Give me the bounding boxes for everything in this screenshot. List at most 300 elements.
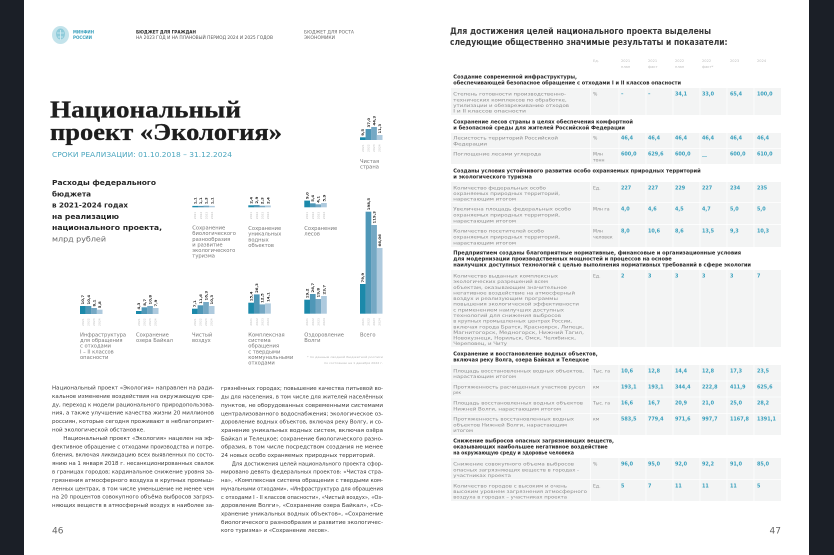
chart heading: на реализацию: [52, 212, 119, 221]
bar chart: Инфраструктура для обращения с отходами: I – II классов: [80, 349, 114, 355]
row: протяженность расчищенных: 344,4: [675, 385, 691, 391]
bar chart: Чистый воздух: [192, 291, 214, 344]
right page heading: [450, 27, 728, 48]
row: снижение выбросов: участниках проекта: [453, 474, 511, 479]
row: площадь восстановленных: [453, 369, 770, 380]
row: количество городов: 7: [648, 484, 652, 490]
row: комплексные экологические разрешения: 2: [621, 274, 624, 280]
row: площадь Нижней Волги: 21,0: [702, 401, 715, 407]
bar chart: Чистый воздух: 7,1: [192, 300, 197, 307]
row: протяженность расчищенных: 411,9: [730, 385, 746, 391]
row: поглощение: тонн: [593, 158, 604, 163]
row: посетители ООПТ: Млн: [593, 229, 603, 235]
row: количество федеральных ООПТ: Количество федеральных особо: [453, 186, 546, 192]
text block: left column: няющих веществ в атмосферный воздух в наиболее за-: [52, 502, 214, 509]
row: площадь ООПТ: охраняемых природных территорий,: [453, 212, 561, 218]
row: степень готовности: 34,1: [675, 92, 688, 98]
row: поглощение: 600,0: [621, 152, 637, 158]
bar chart: Комплексная система обращения с ТКО: обращения: [248, 344, 279, 350]
row: протяженность Нижней Волги: 779,4: [648, 417, 664, 423]
row: площадь Нижней Волги: 20,9: [675, 401, 688, 407]
row: комплексные экологические разрешения: экологических разрешений всем: [453, 278, 549, 285]
bar chart: Сохранение лесов: 5,4: [310, 195, 315, 202]
chart heading: бюджета: [52, 189, 91, 198]
row: поглощение: 600,0: [675, 152, 691, 158]
row: лесистость: %: [593, 136, 598, 142]
bar chart: Инфраструктура для обращения с отходами: 2021: [81, 318, 85, 326]
bar chart: Комплексная система обращения с ТКО: 26,3: [254, 283, 259, 293]
row: площадь ООПТ: 4,0: [621, 207, 630, 213]
bar chart: Чистая страна: страна: [360, 164, 379, 170]
text block: right column: мировано девять федеральных проектов: «Чистая стра-: [221, 470, 383, 476]
row: степень готовности: %: [593, 92, 598, 98]
bar chart: Сохранение лесов: Сохранение: [304, 226, 337, 232]
bar chart: Сохранение биологического разнообразия: 2024: [210, 212, 214, 219]
bar chart: Всего: 119,3: [371, 211, 376, 224]
bar chart: Чистая страна: 2024: [378, 144, 382, 152]
text block: left column: ду, переход к модели рационального природопользова-: [52, 402, 214, 408]
row: площадь Нижней Волги: 16,6: [621, 401, 634, 407]
bar chart: Комплексная система обращения с ТКО: отходами: [248, 361, 275, 367]
bar chart: Чистая страна: 44,3: [371, 116, 376, 126]
section heading: леса: и безопасной среды для жителей Российской Федерации: [453, 125, 626, 132]
row: протяженность Нижней Волги: 1391,1: [757, 417, 776, 423]
bar chart: Чистая страна: 11,3: [377, 124, 382, 134]
row: протяженность Нижней Волги: [453, 417, 776, 434]
row: количество федеральных ООПТ: 229: [675, 186, 686, 192]
row: площадь восстановленных: 10,6: [621, 369, 634, 375]
row: количество федеральных ООПТ: 227: [702, 186, 713, 192]
bar chart: Оздоровление Волги: 2024: [322, 318, 326, 326]
bar chart: Сохранение биологического разнообразия: Сохранение: [192, 226, 225, 232]
bar chart: Чистый воздух: 11,6: [198, 294, 203, 304]
row: площадь восстановленных: 14,4: [675, 369, 688, 375]
text block: right column: Для достижения целей национального проекта сфор-: [232, 460, 383, 467]
bar chart: Сохранение биологического разнообразия: 1,1: [209, 197, 214, 204]
row: комплексные экологические разрешения: технологий для снижения выбросов: [453, 312, 561, 319]
row: комплексные экологические разрешения: включая города Братск, Красноярск, Липецк,: [453, 324, 585, 330]
row: площадь восстановленных: 12,8: [648, 369, 661, 375]
table column headers: [593, 59, 767, 69]
bar chart: Сохранение уникальных водных объектов: 2,4: [265, 197, 270, 204]
row: протяженность расчищенных: км: [593, 386, 600, 391]
table column headers: 2023: [730, 59, 739, 63]
row: площадь восстановленных: Площадь восстановленных водных объектов,: [453, 369, 585, 375]
row: посетители ООПТ: 10,6: [648, 229, 661, 235]
bar chart: Инфраструктура для обращения с отходами: 2023: [92, 318, 96, 326]
row: посетители ООПТ: 13,5: [702, 229, 715, 235]
right page heading: следующие общественно значимые результаты и показатели:: [450, 37, 728, 48]
section heading: предприятия: для модернизации производственных мощностей и процессов на основе: [453, 256, 672, 263]
bar chart: Всего: 66,06: [377, 234, 382, 247]
bar chart: Сохранение озера Байкал: 2024: [154, 318, 158, 326]
text block: right column: образия, в том числе посредством создания не менее: [221, 445, 384, 451]
row: протяженность расчищенных: рек: [453, 391, 461, 396]
row: количество городов: [453, 484, 761, 501]
bar chart: Всего: 2023: [372, 318, 376, 326]
section heading: ООПТ: и экологического туризма: [453, 175, 532, 181]
row: поглощение: 610,0: [757, 152, 773, 158]
row: площадь ООПТ: 4,5: [675, 207, 684, 213]
table column headers: 2024: [757, 59, 767, 63]
row: количество городов: 11: [675, 484, 682, 490]
row: количество федеральных ООПТ: 235: [757, 186, 768, 192]
row: посетители ООПТ: [453, 228, 770, 246]
row: площадь восстановленных: 17,3: [730, 369, 743, 375]
bar chart: Всего: 2024: [378, 318, 382, 326]
table: results and indicators: [451, 59, 781, 501]
row: количество городов: 11: [730, 484, 737, 490]
table column headers: план: [675, 65, 685, 69]
bar chart: Сохранение уникальных водных объектов: 2022: [255, 212, 259, 219]
bar chart: Сохранение лесов: 2022: [311, 212, 315, 219]
row: степень готовности: [453, 92, 773, 114]
text block: right column: 24 новых особо охраняемых природных территорий.: [221, 452, 375, 459]
section heading: выбросы: оказывающих наибольшее негативное воздействие: [453, 444, 608, 451]
bar chart: Инфраструктура для обращения с отходами: 2022: [86, 318, 90, 326]
row: снижение выбросов: 95,0: [648, 462, 661, 468]
row: степень готовности: I и II классов опасности: [453, 108, 526, 114]
row: комплексные экологические разрешения: [453, 274, 761, 347]
row: площадь ООПТ: [453, 207, 766, 224]
text block: right column: централизованного водоснабжения; экологическое оз-: [221, 411, 383, 417]
text block: right column: с отходами I - II классов опасности», «Чистый воздух», «Оз-: [221, 494, 383, 501]
section heading: водные объекты: Сохранение и восстановление водных объектов,: [453, 351, 598, 358]
row: количество федеральных ООПТ: охраняемых природных территорий,: [453, 190, 561, 197]
bar chart: Чистый воздух: 10,3: [209, 295, 214, 304]
bar chart: Оздоровление Волги: Волги: [304, 338, 320, 344]
row: количество федеральных ООПТ: [453, 186, 768, 203]
chart heading: млрд рублей: [52, 234, 106, 243]
bar chart: Инфраструктура для обращения с отходами: 10,4: [86, 295, 91, 304]
bar chart: Комплексная система обращения с ТКО: 2021: [249, 318, 253, 326]
bar chart: Всего: 79,9: [360, 273, 365, 283]
text block: left column: ной экологической обстановке.: [52, 426, 145, 434]
bar chart: Чистый воздух: 16,3: [203, 291, 208, 300]
row: площадь восстановленных: Тыс. га: [592, 369, 610, 375]
text block: right column: [221, 385, 384, 534]
bar chart: Всего: 2021: [361, 318, 365, 326]
table column headers: 2021: [648, 59, 657, 63]
text block: left column: ния, а также улучшение качества жизни 20 миллионов: [52, 411, 214, 417]
bar chart: Инфраструктура для обращения с отходами: 5,8: [97, 301, 102, 308]
bar chart: Инфраструктура для обращения с отходами: для обращения: [80, 338, 122, 344]
row: лесистость: Лесистость территорий Российской: [453, 135, 558, 142]
row: протяженность расчищенных: Протяженность расчищенных участков русел: [453, 385, 585, 391]
bar chart: Сохранение лесов: 2024: [322, 212, 326, 219]
row: количество городов: 11: [702, 484, 709, 490]
section heading: выбросы: [453, 438, 614, 457]
bar chart: Сохранение уникальных водных объектов: объектов: [248, 243, 274, 249]
row: степень готовности: –: [648, 92, 651, 98]
text block: right column: Байкал и Телецкое; сохранение биологического разно-: [221, 435, 383, 442]
bar chart: Оздоровление Волги: 2021: [305, 318, 309, 326]
row: площадь Нижней Волги: Площадь восстановленных водных объектов: [453, 401, 583, 407]
bar chart: Комплексная система обращения с ТКО: система: [248, 338, 271, 344]
bar chart: Чистая страна: 9,5: [360, 129, 365, 136]
right page heading: Для достижения целей национального проекта выделены: [450, 27, 711, 37]
bar chart: Оздоровление Волги: 26,7: [310, 283, 315, 293]
bar chart: Инфраструктура для обращения с отходами: 10,7: [80, 295, 85, 304]
bar chart: Комплексная система обращения с ТКО: [248, 283, 293, 366]
bar chart: Чистый воздух: воздух: [192, 338, 211, 344]
bar chart: Сохранение биологического разнообразия: и развитие: [192, 242, 223, 248]
bar chart: Чистая страна: 2022: [366, 144, 370, 152]
row: комплексные экологические разрешения: 7: [757, 274, 761, 280]
row: посетители ООПТ: 8,0: [621, 229, 630, 235]
row: комплексные экологические разрешения: 3: [730, 274, 734, 280]
section heading: предприятия: [453, 250, 752, 268]
bar chart: Сохранение лесов: 9,0: [304, 192, 309, 199]
bar chart: Всего: 198,5: [366, 198, 371, 210]
row: количество городов: 5: [621, 484, 625, 490]
row: снижение выбросов: 92,2: [702, 462, 714, 468]
row: снижение выбросов: 85,0: [757, 462, 770, 468]
row: площадь восстановленных: 12,8: [702, 369, 715, 375]
row: лесистость: 46,4: [621, 136, 634, 142]
header: section name: [304, 30, 354, 40]
bar chart: Оздоровление Волги: 19,2: [304, 288, 309, 298]
row: комплексные экологические разрешения: Череповец, и Читу: [453, 341, 507, 347]
bar chart: Инфраструктура для обращения с отходами: с отходами: [80, 344, 111, 350]
row: площадь ООПТ: нарастающим итогом: [453, 219, 517, 224]
bar chart: Комплексная система обращения с ТКО: 2022: [255, 318, 259, 326]
bar chart: Сохранение уникальных водных объектов: 2,3: [260, 197, 265, 204]
bar chart: Сохранение биологического разнообразия: 2022: [199, 212, 203, 219]
bar chart: Оздоровление Волги: 23,7: [321, 285, 326, 295]
row: посетители ООПТ: охраняемых природных территорий,: [453, 233, 561, 240]
row: площадь ООПТ: Увеличена площадь федеральных особо: [453, 207, 571, 213]
row: протяженность Нижней Волги: 1167,8: [730, 417, 749, 423]
chart footnote: по состоянию на 1 декабря 2022 г.: [324, 361, 383, 365]
bar chart: Сохранение уникальных водных объектов: водных: [248, 237, 269, 243]
bar chart: Сохранение лесов: 5,9: [321, 194, 326, 202]
row: поглощение: [453, 152, 773, 163]
bar chart: Оздоровление Волги: Оздоровление: [304, 333, 344, 339]
row: комплексные экологические разрешения: 3: [675, 274, 679, 280]
row: протяженность расчищенных: 193,1: [648, 385, 664, 391]
bar chart: Комплексная система обращения с ТКО: Комплексная: [248, 333, 285, 339]
bar chart: Оздоровление Волги: 2022: [311, 318, 315, 326]
bar chart: Сохранение лесов: 2021: [305, 212, 309, 219]
row: лесистость: 46,4: [757, 136, 770, 142]
text block: left column: грязнения атмосферного воздуха в крупных промыш-: [52, 478, 214, 484]
bar chart: Инфраструктура для обращения с отходами: 2024: [98, 318, 102, 326]
row: поглощение: Поглощение лесами углерода: [453, 152, 541, 158]
bar chart: Чистая страна: 2021: [361, 144, 365, 152]
row: степень готовности: 65,4: [730, 92, 743, 98]
row: комплексные экологические разрешения: 3: [648, 274, 652, 280]
bar chart: Сохранение озера Байкал: 2021: [137, 318, 141, 326]
row: лесистость: 46,4: [648, 136, 661, 142]
row: комплексные экологические разрешения: Магнитогорск, Медногорск, Нижний Тагил,: [453, 329, 585, 336]
row: степень готовности: 33,0: [702, 92, 715, 98]
bar chart: Сохранение уникальных водных объектов: 2024: [266, 212, 270, 219]
bar chart: Чистая страна: 2023: [372, 144, 376, 152]
header: document title: [136, 30, 273, 40]
row: комплексные экологические разрешения: 3: [702, 274, 706, 280]
section heading: ООПТ: [453, 168, 701, 181]
row: снижение выбросов: 91,0: [730, 462, 743, 468]
row: комплексные экологические разрешения: объектам, оказывающим значительное: [453, 285, 567, 291]
bar chart: Чистый воздух: 2021: [193, 318, 197, 326]
bar chart: Комплексная система обращения с ТКО: коммунальными: [248, 355, 293, 361]
row: лесистость: 46,4: [702, 136, 715, 142]
bar chart: Сохранение уникальных водных объектов: уникальных: [248, 232, 281, 238]
row: посетители ООПТ: 8,6: [675, 229, 684, 235]
text block: left column: на 20 процентов совокупного объёма выбросов загряз-: [52, 495, 214, 501]
bar chart: Сохранение биологического разнообразия: экологического: [192, 248, 235, 254]
row: посетители ООПТ: Количество посетителей особо: [453, 228, 544, 235]
header: section name: БЮДЖЕТ ДЛЯ РОСТА: [304, 30, 354, 34]
bar chart: Чистая страна: [360, 116, 382, 170]
bar chart: Сохранение биологического разнообразия: 1,1: [193, 197, 198, 204]
row: протяженность Нижней Волги: объектов Нижней Волги, нарастающим: [453, 421, 568, 428]
bar chart: Чистый воздух: Чистый: [192, 332, 212, 338]
bar chart: Комплексная система обращения с ТКО: с твердыми: [248, 349, 280, 355]
title: Национальный: [50, 96, 241, 124]
row: снижение выбросов: 92,0: [675, 462, 688, 468]
bar chart: Сохранение биологического разнообразия: разнообразия: [192, 237, 230, 243]
section heading: ООПТ: Созданы условия устойчивого развития особо охраняемых природных территорий: [453, 168, 701, 175]
bar chart: Всего: Всего: [360, 333, 376, 339]
row: площадь ООПТ: 4,7: [702, 207, 711, 213]
bar chart: Сохранение озера Байкал: озера Байкал: [136, 337, 173, 344]
bar chart: Сохранение уникальных водных объектов: 2021: [249, 212, 253, 219]
bar chart: Сохранение лесов: 2023: [316, 212, 320, 219]
text block: left column: ленных центрах, в том числе уменьшение не менее чем: [52, 486, 214, 492]
chart heading: [52, 178, 162, 243]
bar chart: Комплексная система обращения с ТКО: 12,5: [260, 293, 265, 303]
bar chart: Оздоровление Волги: 19,8: [316, 288, 321, 298]
row: площадь ООПТ: Млн га: [593, 207, 610, 213]
row: снижение выбросов: Снижение совокупного объема выбросов: [453, 462, 574, 468]
row: площадь Нижней Волги: 28,2: [757, 401, 769, 407]
row: посетители ООПТ: человек: [593, 235, 613, 240]
bar chart: Сохранение лесов: лесов: [304, 232, 320, 238]
chart footnote: * по данным сводной бюджетной росписи: [307, 355, 383, 359]
title: проект «Экология»: [50, 119, 282, 146]
header: ministry logo: [52, 26, 94, 44]
row: снижение выбросов: 96,0: [621, 462, 634, 468]
row: посетители ООПТ: 10,3: [757, 229, 770, 235]
text block: right column: мунальными отходами», «Инфраструктура для обращения: [221, 486, 383, 492]
section heading: инфраструктура: Создание современной инфраструктуры,: [453, 74, 577, 81]
text block: right column: пунктов, не оборудованных современными системами: [221, 403, 383, 409]
text block: left column: россиян, которые сегодня проживают в неблагоприят-: [52, 419, 214, 425]
text block: right column: ды для населения, в том числе для жителей населённых: [221, 394, 384, 401]
subtitle: project dates: СРОКИ РЕАЛИЗАЦИИ: 01.10.2018 – 31.12.2024: [52, 150, 232, 159]
section heading: водные объекты: включая реку Волга, озера Байкал и Телецкое: [453, 357, 590, 364]
bar chart: Сохранение озера Байкал: 4,3: [136, 302, 141, 310]
chart heading: Расходы федерального: [52, 178, 156, 187]
text block: right column: на», «Комплексная система обращения с твердыми ком-: [221, 478, 383, 484]
row: лесистость: 46,4: [730, 136, 743, 142]
row: степень готовности: Степень готовности производственно-: [453, 92, 566, 98]
section heading: леса: Сохранение лесов страны в целях обеспечения комфортной: [453, 119, 634, 126]
bar chart: Сохранение лесов: [304, 192, 337, 238]
row: протяженность Нижней Волги: 971,6: [675, 417, 691, 423]
row: протяженность Нижней Волги: 583,5: [621, 417, 637, 423]
bar chart: Сохранение озера Байкал: Сохранение: [136, 332, 169, 338]
row: площадь восстановленных: 23,5: [757, 369, 770, 375]
bar chart: Всего: [360, 198, 382, 338]
bar chart: Сохранение озера Байкал: 10,8: [147, 295, 152, 304]
bar chart: Сохранение биологического разнообразия: туризма: [192, 254, 215, 260]
text block: right column: хранение уникальных водных объектов», «Сохранение: [221, 511, 384, 517]
text block: right column: биологического разнообразия и развитие экологичес-: [221, 520, 383, 526]
text block: right column: грязнённых городах; повышение качества питьевой во-: [221, 385, 383, 392]
section heading: инфраструктура: обеспечивающей безопасное обращение с отходами I и II классов опасности: [453, 80, 682, 87]
bar chart: Инфраструктура для обращения с отходами: 8,1: [91, 299, 96, 306]
row: протяженность Нижней Волги: итогом: [453, 429, 474, 434]
bar chart: Сохранение биологического разнообразия: 1,1: [198, 197, 203, 204]
row: количество федеральных ООПТ: 234: [730, 186, 741, 192]
bar chart: Сохранение лесов: 4,1: [316, 196, 321, 203]
table column headers: план: [621, 65, 631, 69]
text block: left column: [52, 384, 215, 509]
bar chart: Сохранение озера Байкал: 2022: [142, 318, 146, 326]
bar chart: Сохранение биологического разнообразия: биологического: [192, 231, 236, 237]
row: площадь Нижней Волги: 16,7: [648, 401, 661, 407]
row: протяженность Нижней Волги: Протяженность восстановленных водных: [453, 417, 574, 423]
row: площадь Нижней Волги: [453, 401, 769, 412]
bar chart: Комплексная система обращения с ТКО: 2023: [260, 318, 264, 326]
text block: right column: доровление Волги», «Сохранение озера Байкал», «Со-: [221, 502, 383, 509]
bar chart: Сохранение уникальных водных объектов: 2,4: [249, 197, 254, 204]
row: комплексные экологические разрешения: негативное воздействие на атмосферный: [453, 289, 575, 296]
page number 46: 46: [52, 526, 64, 536]
row: лесистость: 46,4: [675, 136, 688, 142]
row: количество федеральных ООПТ: нарастающим итогом: [453, 198, 517, 203]
row: площадь ООПТ: 4,6: [648, 207, 657, 213]
bar chart: Инфраструктура для обращения с отходами: опасности: [80, 355, 108, 361]
bar chart: Оздоровление Волги: [304, 283, 344, 344]
text block: right column: кого туризма» и «Сохранение лесов».: [221, 528, 329, 534]
row: количество городов: высоким уровнем загрязнения атмосферного: [453, 489, 587, 495]
section heading: предприятия: Предприятием созданы благоприятные нормативные, финансовые и организационные условия: [453, 250, 741, 257]
row: количество городов: 5: [757, 484, 761, 490]
icon: emblem: [52, 26, 69, 44]
row: количество городов: воздуха в городах – участниках проекта: [453, 496, 567, 501]
bar chart: Чистый воздух: 2023: [204, 318, 208, 326]
row: комплексные экологические разрешения: Новокузнецк, Норильск, Омск, Челябинск,: [453, 336, 577, 342]
row: протяженность расчищенных: 193,1: [621, 385, 637, 391]
bar chart: Сохранение уникальных водных объектов: [248, 196, 281, 249]
row: протяженность расчищенных: 625,6: [757, 385, 773, 391]
row: поглощение: Млн: [593, 152, 603, 158]
bar chart: Инфраструктура для обращения с отходами: [80, 295, 126, 361]
table column headers: Ед.: [593, 59, 599, 63]
row: количество федеральных ООПТ: Ед.: [593, 186, 601, 192]
bar chart: Оздоровление Волги: 2023: [316, 318, 320, 326]
row: снижение выбросов: [453, 462, 770, 479]
page number 47: 47: [770, 526, 781, 536]
bar chart: Сохранение озера Байкал: 2023: [148, 318, 152, 326]
header: section name: ЭКОНОМИКИ: [304, 35, 335, 40]
bar chart: Комплексная система обращения с ТКО: 14,1: [265, 292, 270, 302]
row: площадь Нижней Волги: Тыс. га: [592, 401, 610, 407]
section heading: выбросы: Снижение выбросов опасных загрязняющих веществ,: [453, 438, 614, 445]
row: комплексные экологические разрешения: с применением наилучших доступных: [453, 308, 564, 313]
bar chart: Чистая страна: 37,0: [366, 118, 371, 128]
row: комплексные экологические разрешения: Ед.: [593, 274, 601, 280]
text block: right column: хранение уникальных водных систем, включая озёра: [221, 428, 383, 434]
section heading: инфраструктура: [453, 74, 682, 87]
row: поглощение: 629,6: [648, 152, 664, 158]
chart heading: в 2021-2024 годах: [52, 201, 128, 210]
title: [50, 96, 282, 146]
